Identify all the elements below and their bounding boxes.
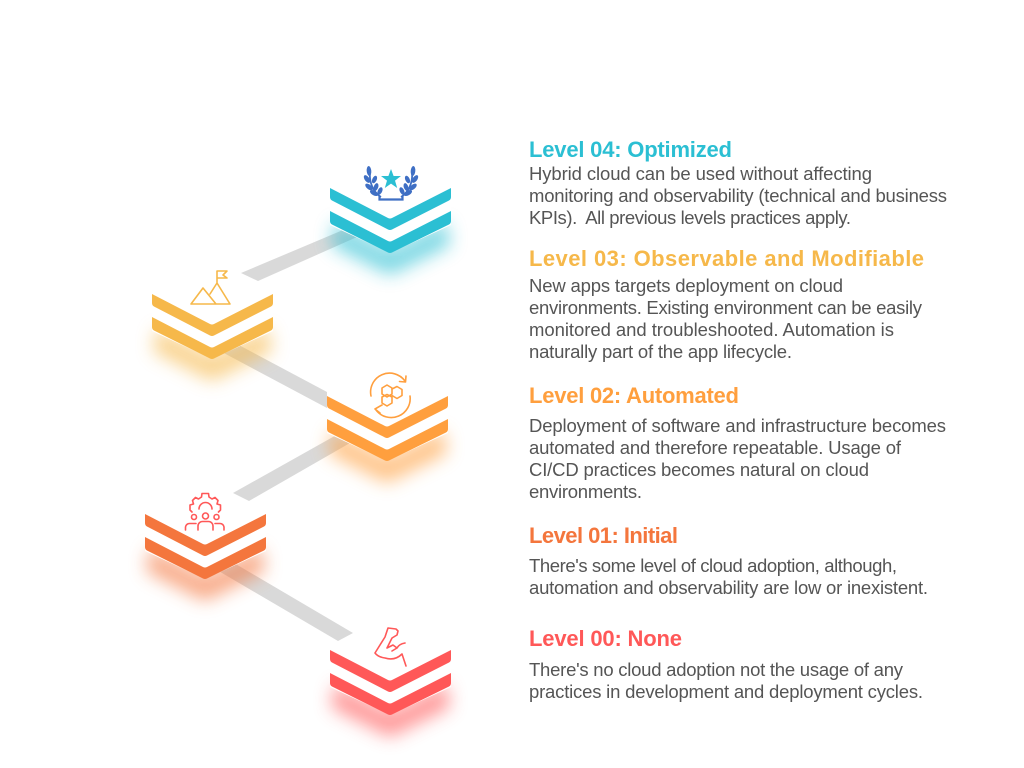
- description: level 03: New apps targets deployment on cloud: [529, 275, 843, 296]
- heading: level 04: Level 04: Optimized: [529, 137, 732, 162]
- description: level 04: monitoring and observability (technical and business: [529, 185, 947, 206]
- connector: level 03 to level 04: [241, 230, 357, 281]
- tile: level 03: [152, 259, 273, 381]
- connector: level 03 to level 02: [205, 327, 327, 408]
- tile: level 01: [145, 479, 266, 601]
- description: level 01: There's some level of cloud adoption, although,: [529, 555, 897, 576]
- text: level 01: [529, 523, 928, 598]
- icon: hexagons in refresh cycle: [371, 373, 410, 418]
- heading: level 03: Level 03: Observable and Modifiable: [529, 246, 924, 271]
- description: level 03: environments. Existing environment can be easily: [529, 297, 923, 318]
- connector: level 01 to level 00: [205, 546, 353, 641]
- text: level 04: [529, 137, 947, 228]
- tile: level 04: [330, 153, 451, 275]
- description: level 03: [529, 275, 923, 362]
- icon: laurel wreath with star: [363, 166, 419, 200]
- description: level 00: [529, 659, 923, 702]
- tile: level 02: [327, 361, 448, 483]
- icon: gear with people: [186, 494, 224, 530]
- text: level 02: [529, 383, 946, 502]
- text: level 00: [529, 626, 923, 702]
- description: level 02: CI/CD practices becomes natural on cloud: [529, 459, 869, 480]
- connector: level 01 to level 02: [233, 433, 350, 501]
- description: level 02: Deployment of software and infrastructure becomes: [529, 415, 946, 436]
- description: level 03: naturally part of the app lifecycle.: [529, 341, 792, 362]
- heading: level 01: Level 01: Initial: [529, 523, 678, 548]
- description: level 02: [529, 415, 946, 502]
- description: level 01: automation and observability are low or inexistent.: [529, 577, 928, 598]
- description: level 00: There's no cloud adoption not the usage of any: [529, 659, 904, 680]
- tile: level 00: [330, 615, 451, 737]
- description: level 02: automated and therefore repeatable. Usage of: [529, 437, 902, 458]
- icon: flexed arm: [375, 628, 406, 666]
- description: level 01: [529, 555, 928, 598]
- description: level 04: KPIs). All previous levels practices apply.: [529, 207, 851, 228]
- heading: level 00: Level 00: None: [529, 626, 682, 651]
- description: level 04: [529, 163, 947, 228]
- description: level 02: environments.: [529, 481, 642, 502]
- text: level 03: [529, 246, 924, 362]
- description: level 04: Hybrid cloud can be used without affecting: [529, 163, 872, 184]
- description: level 00: practices in development and deployment cycles.: [529, 681, 923, 702]
- heading: level 02: Level 02: Automated: [529, 383, 739, 408]
- description: level 03: monitored and troubleshooted. Automation is: [529, 319, 894, 340]
- icon: mountains with flag: [191, 271, 230, 304]
